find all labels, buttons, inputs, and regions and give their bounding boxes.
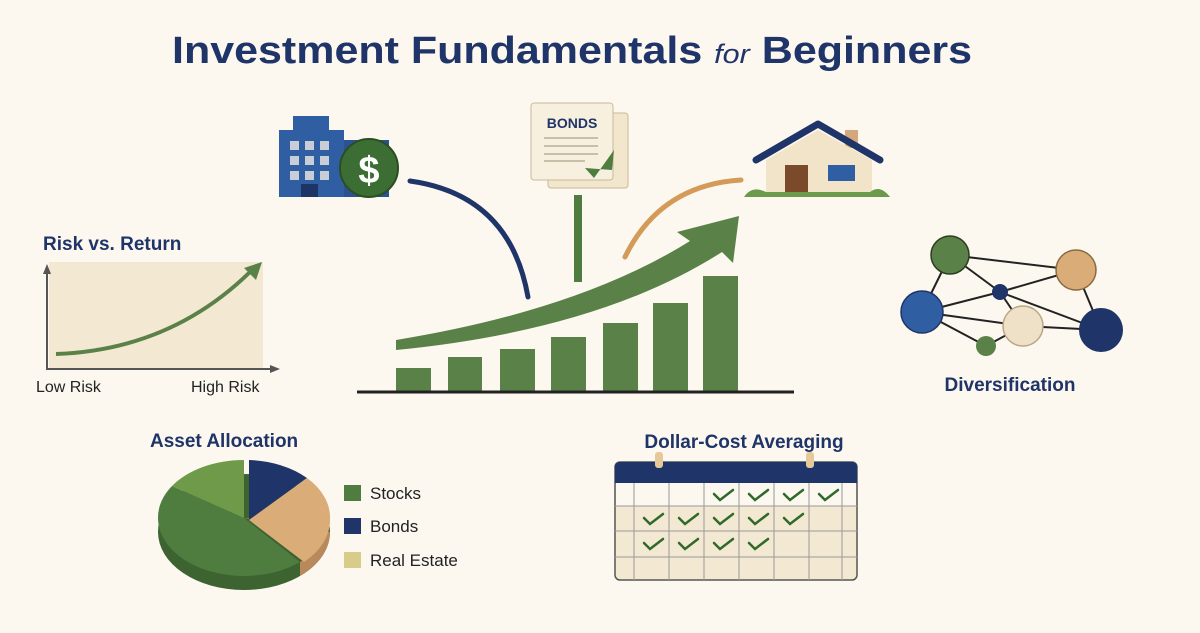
arrow: navy arc from stocks [410, 181, 528, 297]
icon: bonds document: BONDS [547, 115, 597, 131]
panel: asset allocation pie: Bonds [370, 517, 418, 536]
panel: diversification network: Diversification [945, 375, 1075, 396]
panel: dollar-cost averaging calendar [615, 432, 857, 580]
icon: bonds document [531, 103, 628, 188]
icon: office building with dollar coin: $ [358, 150, 380, 192]
title: Investment Fundamentals for Beginners [172, 30, 972, 72]
panel: asset allocation pie: Asset Allocation [150, 431, 298, 452]
panel: risk vs return: High Risk [191, 379, 260, 396]
panel: risk vs return [36, 234, 280, 396]
arrow: green line from bonds [574, 195, 582, 282]
icon: office building with dollar coin [279, 116, 398, 197]
panel: risk vs return: Risk vs. Return [43, 234, 181, 255]
panel: risk vs return: Low Risk [36, 379, 102, 396]
panel: asset allocation pie [150, 431, 458, 590]
panel: asset allocation pie: Real Estate [370, 551, 458, 570]
panel: asset allocation pie: Stocks [370, 484, 421, 503]
icon: house [744, 124, 890, 197]
bar chart with growth arrow [357, 216, 794, 392]
arrow: orange arc to house [625, 180, 741, 257]
panel: diversification network [901, 236, 1123, 396]
panel: dollar-cost averaging calendar: Dollar-Cost Averaging [644, 432, 844, 453]
